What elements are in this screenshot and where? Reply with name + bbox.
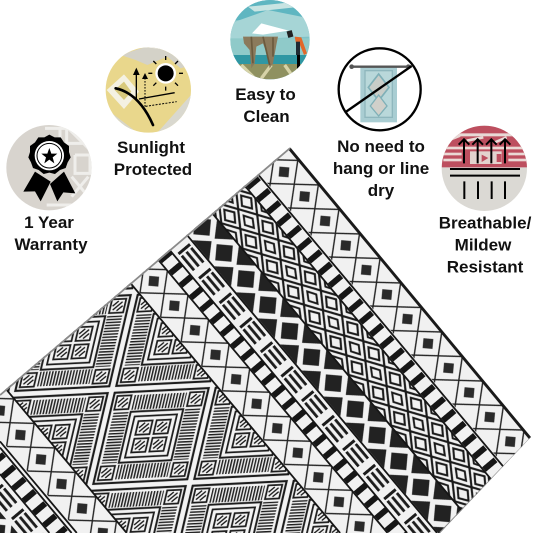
label: Breathable/Mildew Resistant: Mildew [455, 236, 512, 254]
label: Easy to Clean: Easy to [235, 85, 296, 104]
black diamond and triangle band [192, 218, 462, 533]
patterned rug [0, 148, 531, 533]
icon: sunlight protection [106, 47, 191, 133]
lattice band 3 [0, 398, 118, 533]
icon: warranty badge [6, 125, 92, 210]
rug black top-right border [290, 148, 531, 438]
concentric diamond band [214, 186, 490, 510]
lattice band 1 [266, 158, 524, 457]
ladder band 1 [246, 176, 498, 472]
label: No need to hang or line dry: dry [368, 181, 395, 200]
striped E band 2 [0, 484, 44, 533]
label: No need to hang or line dry: No need to [337, 137, 425, 156]
label: 1 Year Warranty: 1 Year [24, 213, 74, 232]
label: Sunlight Protected: Sunlight [117, 138, 185, 157]
label: Breathable/Mildew Resistant: Breathable/ [439, 214, 532, 232]
label: Easy to Clean: Clean [243, 107, 290, 126]
label: Breathable/Mildew Resistant [439, 214, 532, 276]
icon: hose cleaning rug [230, 0, 310, 79]
label: Sunlight Protected: Protected [114, 160, 192, 179]
rug grey edges [0, 148, 531, 533]
striped E band [168, 232, 437, 533]
label: Breathable/Mildew Resistant: Resistant [447, 258, 524, 276]
central band of large geometric diamonds [8, 283, 338, 533]
label: No need to hang or line dry: hang or line [333, 159, 429, 178]
icon: breathable arrows [442, 126, 527, 211]
label: Easy to Clean [235, 85, 296, 126]
label: 1 Year Warranty [14, 213, 88, 254]
ladder band 3 [0, 450, 70, 533]
label: 1 Year Warranty: Warranty [14, 235, 88, 254]
label: Sunlight Protected [114, 138, 192, 179]
lattice band 2 [139, 268, 374, 533]
ladder band 2 [156, 247, 407, 533]
black diamond band 2 [0, 512, 18, 533]
icon: no need to hang [339, 48, 421, 130]
label: No need to hang or line dry [333, 137, 429, 200]
